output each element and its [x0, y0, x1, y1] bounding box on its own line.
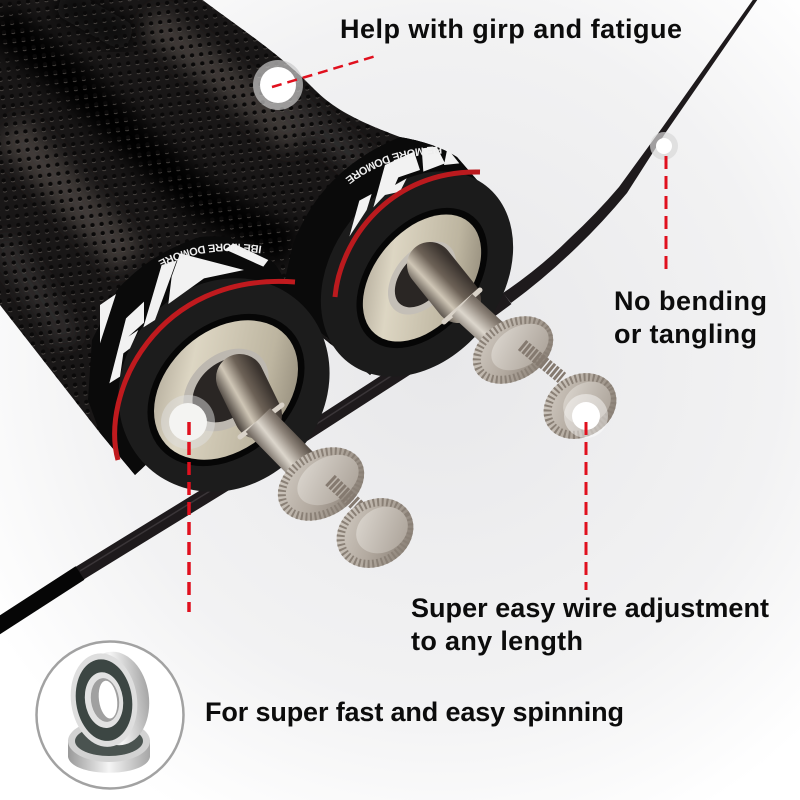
icon ring [36, 642, 184, 788]
thread: left [330, 480, 360, 508]
grips [0, 0, 478, 475]
bearing: left [126, 292, 326, 488]
marker: grip [253, 56, 376, 110]
label: adjustment: to any length [411, 626, 583, 656]
grip texture [0, 0, 477, 472]
marker: adjuster [564, 394, 608, 590]
marker: bearing [161, 395, 215, 612]
label: wire: No bending [614, 286, 767, 316]
shaft: right [430, 265, 458, 300]
shaft: left [240, 378, 258, 415]
thumb wheel: right [461, 303, 565, 397]
left handle [100, 243, 330, 492]
label: spinning: For super fast and easy spinning [205, 697, 624, 727]
wire: highlight [80, 338, 450, 571]
right handle [321, 146, 514, 376]
label: grip: Help with girp and fatigue [340, 14, 682, 44]
knob: left [324, 484, 426, 582]
logo band: right [285, 137, 477, 340]
band text: right: BE MORE DOMORE [345, 146, 442, 184]
marker: wire [650, 132, 678, 274]
wire: end sleeve [0, 573, 80, 628]
grip base [0, 0, 477, 475]
icon: ball bearings [36, 642, 184, 788]
grip valley [0, 20, 290, 250]
red ring: right [335, 172, 480, 297]
thumb wheel: left [265, 432, 377, 536]
recess: left [117, 283, 335, 497]
end cap: left [75, 235, 373, 535]
knob: right [532, 360, 628, 452]
label: adjustment: Super easy wire adjustment [411, 593, 769, 623]
grip highlights [0, 20, 370, 340]
wire: thick section [0, 298, 507, 628]
bearing: right [339, 192, 505, 364]
thread: right [522, 345, 562, 378]
jump rope wire [0, 0, 760, 628]
upper bearing [65, 647, 155, 751]
recess: right [330, 183, 514, 373]
collar: left [240, 405, 282, 437]
label: wire [614, 286, 767, 349]
lower bearing [68, 720, 150, 773]
wire: tapering section [503, 0, 760, 303]
label: wire: or tangling [614, 319, 757, 349]
collar: right [444, 290, 480, 322]
logo: right [349, 147, 459, 237]
label: adjustment [411, 593, 769, 656]
logo band: left [88, 236, 284, 475]
red ring: left [115, 281, 295, 460]
end cap: right [281, 133, 553, 415]
right adjuster [430, 265, 628, 452]
left adjuster [240, 378, 426, 582]
logo: left [100, 243, 268, 383]
band text: left: IBE MORE DOMORE [158, 244, 262, 267]
